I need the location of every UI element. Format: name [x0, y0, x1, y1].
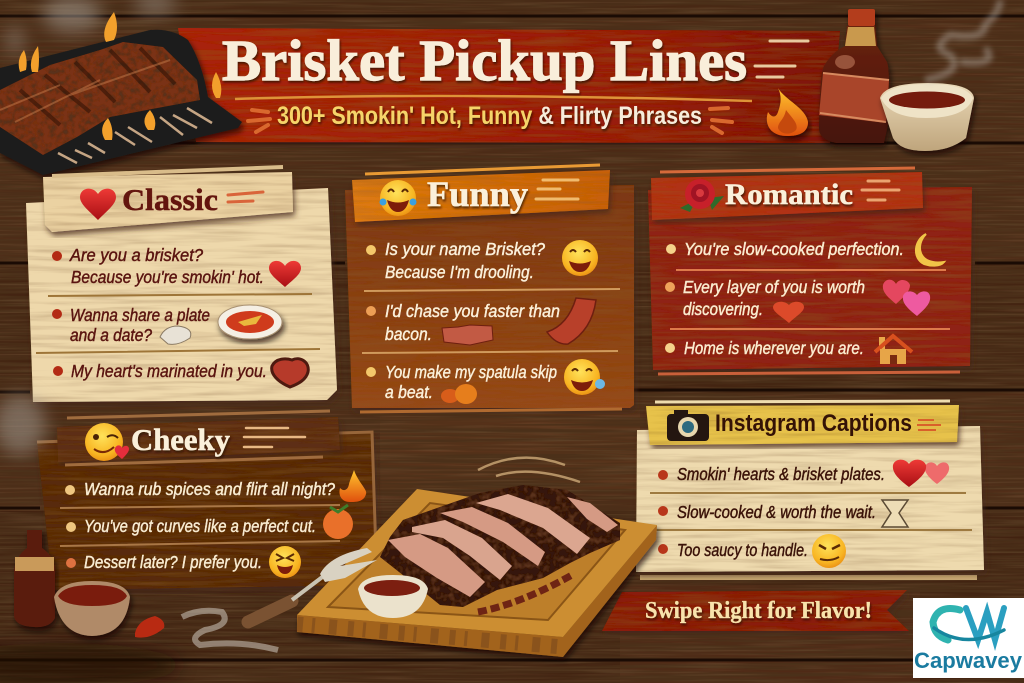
- brisket top: [20, 48, 175, 125]
- instagram card: [636, 426, 984, 572]
- icon: bacon: [442, 325, 493, 345]
- romantic card: [648, 187, 972, 370]
- icon: grill with brisket: [0, 12, 242, 175]
- icon: laughing emoji: [380, 180, 416, 216]
- icon: flame on banner: [767, 88, 808, 136]
- icon: crescent moon: [916, 234, 944, 266]
- smoke top right: [925, 0, 1000, 80]
- title banner: [178, 28, 840, 143]
- brisket highlights: [0, 60, 170, 122]
- title underline: [235, 96, 752, 101]
- icon: hourglass: [882, 500, 908, 527]
- icon: sauce ramekin: [880, 83, 974, 151]
- cheeky lines: [65, 479, 335, 572]
- classic lines: [52, 245, 267, 381]
- icon: flame: [339, 470, 366, 502]
- icon: squinting emoji: [269, 546, 301, 578]
- panel: romantic: [648, 168, 972, 374]
- grill tray: [0, 30, 242, 175]
- funny lines: You make my spatula skip: [385, 362, 557, 382]
- icon: chili: [135, 616, 164, 638]
- icon: heart: [269, 261, 301, 287]
- funny lines: a beat.: [385, 382, 433, 402]
- logo: capwavey: [913, 598, 1024, 678]
- classic lines: My heart's marinated in you.: [71, 361, 267, 381]
- icon: drooling emoji: [562, 240, 598, 276]
- cheeky accents: [244, 428, 305, 447]
- panel: classic: [26, 167, 337, 402]
- icon: two hearts: [893, 460, 949, 487]
- icon: sauce bowl: [54, 581, 130, 636]
- romantic lines: [665, 239, 904, 358]
- classic header plank: [43, 172, 293, 232]
- funny lines: Is your name Brisket?: [385, 239, 545, 259]
- icon: rose: [680, 179, 724, 212]
- romantic header plank: [651, 172, 923, 220]
- icon: peach: [323, 505, 353, 539]
- icon: small bottle: [14, 530, 55, 627]
- icon: peach: [441, 384, 477, 404]
- logo mark: [933, 608, 1004, 640]
- cheeky header plank: [57, 417, 340, 462]
- fork: [248, 548, 377, 622]
- icon: plate of food: [218, 305, 282, 339]
- title: Brisket Pickup Lines: [222, 28, 747, 93]
- funny heading: Funny: [427, 174, 528, 214]
- classic lines: Wanna share a plate: [70, 305, 210, 325]
- funny lines: bacon.: [385, 324, 432, 344]
- funny accents: [536, 180, 578, 199]
- romantic lines: You're slow-cooked perfection.: [684, 239, 904, 259]
- instagram lines: Smokin' hearts & brisket plates.: [677, 464, 885, 484]
- classic heading: Classic: [122, 182, 218, 217]
- cheeky card border: [37, 432, 377, 585]
- icon: bacon strips: [547, 298, 596, 344]
- classic header strip: [52, 167, 283, 176]
- icon: sauce bottle: [819, 9, 889, 143]
- panel: instagram captions: [636, 401, 984, 580]
- icon: camera: [667, 410, 709, 441]
- instagram heading: Instagram Captions: [715, 410, 912, 437]
- romantic lines: Every layer of you is worth: [683, 277, 865, 297]
- romantic header strip: [660, 168, 915, 172]
- panel: cheeky: [37, 411, 377, 590]
- sliced brisket: [380, 485, 620, 612]
- ribbon: swipe right: [602, 590, 909, 631]
- flames: [19, 12, 221, 140]
- smoke left: [0, 395, 46, 455]
- cheeky card: [37, 432, 377, 590]
- instagram lines: Too saucy to handle.: [677, 540, 808, 560]
- romantic bottom strip: [658, 372, 960, 374]
- logo text: Capwavey: [914, 648, 1023, 673]
- funny lines: Because I'm drooling.: [385, 262, 534, 282]
- cheeky lines: You've got curves like a perfect cut.: [84, 516, 316, 536]
- instagram lines: [658, 464, 885, 560]
- funny header plank: [352, 170, 610, 222]
- icon: pink hearts: [883, 280, 930, 316]
- instagram header plank: [646, 405, 959, 445]
- funny lines: [366, 239, 560, 402]
- funny header strip: [365, 165, 600, 174]
- cutting board with brisket: [248, 458, 657, 657]
- classic lines: Are you a brisket?: [69, 245, 203, 265]
- board: [297, 489, 657, 657]
- ribbon text: Swipe Right for Flavor!: [645, 598, 872, 624]
- classic lines: Because you're smokin' hot.: [71, 267, 264, 287]
- funny bottom strip: [360, 409, 622, 412]
- classic accents: [228, 192, 263, 202]
- icon: house: [875, 336, 912, 364]
- icon: red heart: [80, 189, 116, 220]
- smoke swirl: [182, 611, 278, 650]
- cheeky lines: Wanna rub spices and flirt all night?: [84, 479, 335, 499]
- instagram bottom strip: [640, 575, 977, 580]
- grill rack: [58, 108, 212, 163]
- icon: spoon: [160, 326, 191, 344]
- classic card: [26, 188, 337, 402]
- instagram lines: Slow-cooked & worth the wait.: [677, 502, 876, 522]
- instagram accents: [917, 420, 941, 430]
- motion lines: [478, 458, 580, 482]
- instagram top strip: [655, 401, 950, 402]
- ramekin on board: [358, 575, 428, 618]
- icon: red heart: [773, 302, 804, 323]
- funny card: [345, 185, 634, 408]
- title accents: [248, 41, 808, 133]
- panel: funny: [345, 165, 634, 412]
- romantic lines: discovering.: [683, 299, 763, 319]
- classic lines: and a date?: [70, 325, 152, 345]
- funny lines: I'd chase you faster than: [385, 301, 560, 321]
- romantic accents: [862, 181, 899, 200]
- icon: laughing emoji: [564, 359, 605, 395]
- cheeky heading: Cheeky: [131, 422, 230, 457]
- romantic heading: Romantic: [725, 178, 853, 211]
- icon: heart-shaped meat: [272, 359, 308, 387]
- brisket on grill: [0, 42, 200, 155]
- cheeky lines: Dessert later? I prefer you.: [84, 552, 262, 572]
- icon: winking emoji: [85, 423, 129, 461]
- subtitle: 300+ Smokin' Hot, Funny & Flirty Phrases: [277, 102, 702, 130]
- icon: smirking emoji: [812, 534, 846, 568]
- romantic lines: Home is wherever you are.: [684, 338, 864, 358]
- smoke top left: [7, 0, 177, 54]
- cheeky header strips: [65, 411, 330, 465]
